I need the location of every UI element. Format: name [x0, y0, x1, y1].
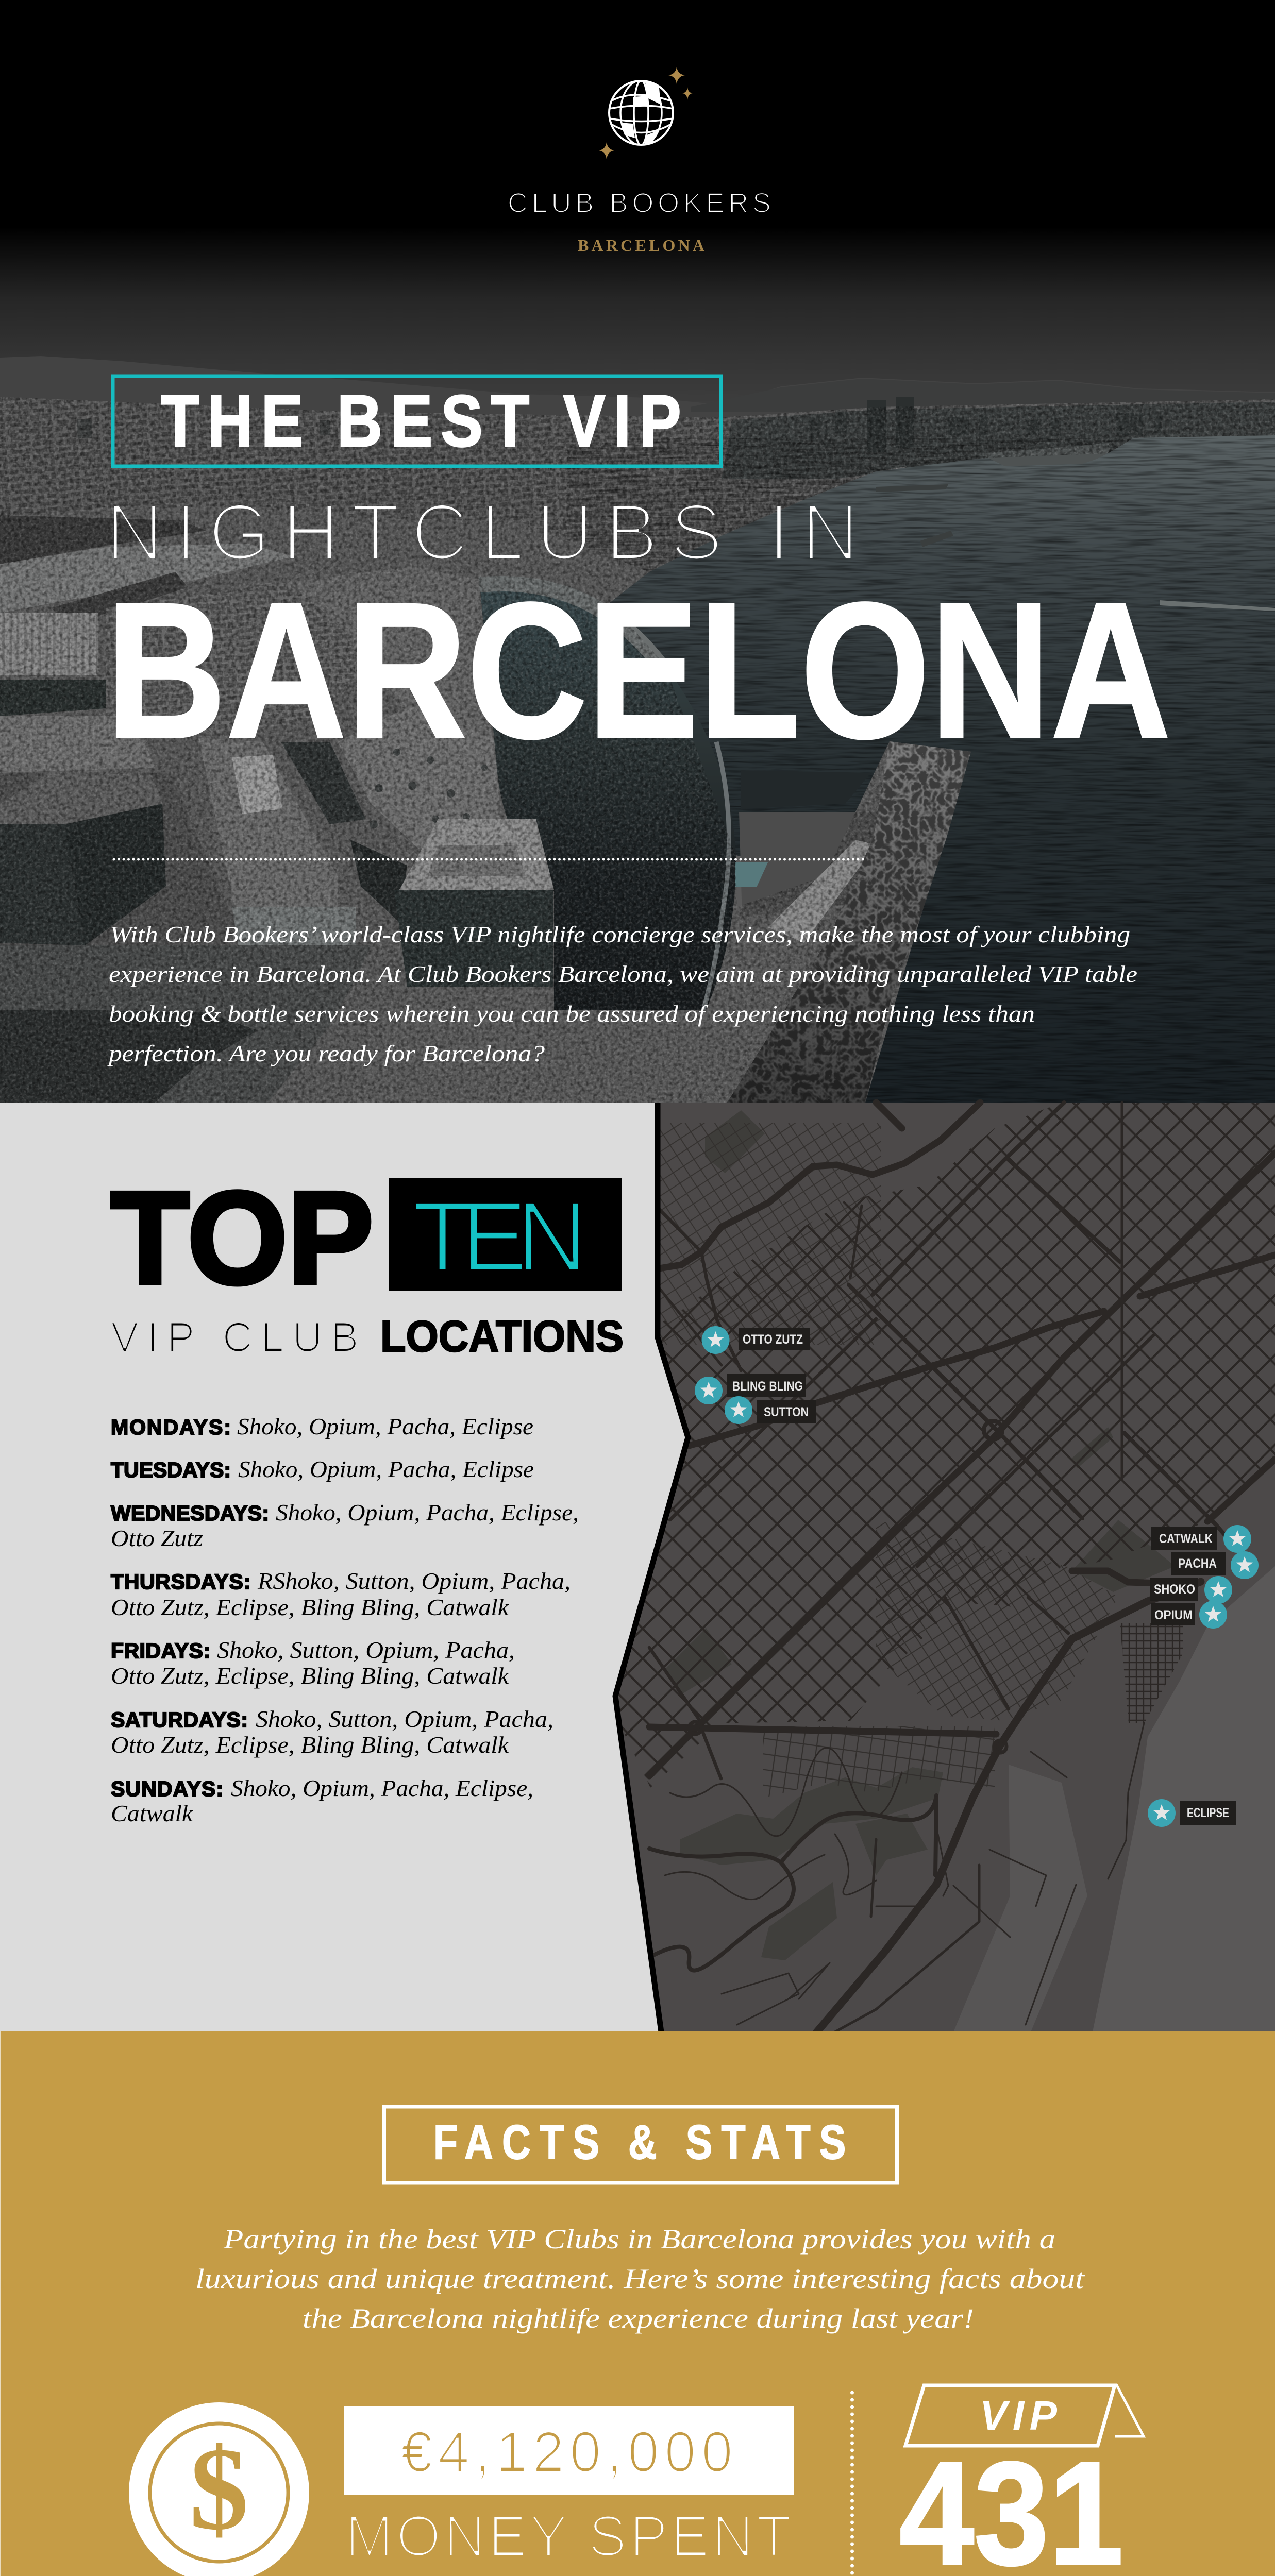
map pin: OTTO ZUTZ: [702, 1326, 810, 1354]
heading: TEN badge: TEN: [412, 1181, 588, 1292]
row: Tuesdays: Shoko, Opium, Pacha, Eclipse: [238, 1456, 534, 1482]
row: Fridays: Otto Zutz, Eclipse, Bling Bling, Catwalk: [111, 1663, 510, 1689]
map pin: OPIUM: OPIUM: [1154, 1608, 1193, 1622]
map pin: SHOKO: SHOKO: [1154, 1582, 1195, 1597]
row: Saturdays: Otto Zutz, Eclipse, Bling Bling, Catwalk: [111, 1732, 510, 1758]
map pin: OTTO ZUTZ: OTTO ZUTZ: [743, 1332, 803, 1347]
map pin: ECLIPSE: ECLIPSE: [1187, 1806, 1229, 1820]
icon: dollar coin: $: [190, 2423, 248, 2554]
logo subtitle: BARCELONA: BARCELONA: [578, 236, 704, 255]
logo: disco ball with stars: [599, 67, 693, 159]
row: Thursdays: THURSDAYS:: [111, 1570, 250, 1594]
VIP ribbon: [905, 2384, 1144, 2446]
row: Wednesdays: Otto Zutz: [111, 1525, 203, 1551]
map pin: OPIUM: [1151, 1601, 1227, 1629]
map pin: PACHA: [1171, 1551, 1259, 1579]
schedule list: [111, 1413, 579, 1826]
row: Mondays: [111, 1413, 533, 1439]
panel: facts and stats: [0, 2031, 1275, 2576]
row: Wednesdays: WEDNESDAYS:: [111, 1501, 269, 1525]
map pin: BLING BLING: BLING BLING: [732, 1379, 803, 1394]
subheading: LOCATIONS: LOCATIONS: [380, 1312, 624, 1361]
vertical dotted divider: [850, 2393, 854, 2576]
row: Thursdays: RShoko, Sutton, Opium, Pacha,: [257, 1568, 571, 1594]
logo wordmark: CLUB BOOKERS: CLUB BOOKERS: [508, 188, 771, 218]
row: Saturdays: Shoko, Sutton, Opium, Pacha,: [256, 1706, 553, 1732]
row: Sundays: SUNDAYS:: [111, 1777, 223, 1801]
grey panel with angled edge: [0, 1103, 688, 2032]
row: Sundays: Catwalk: [111, 1800, 194, 1826]
row: Tuesdays: [111, 1456, 534, 1482]
map pin: SHOKO: [1150, 1576, 1232, 1604]
row: Mondays: Shoko, Opium, Pacha, Eclipse: [237, 1413, 533, 1439]
row: Thursdays: [111, 1568, 571, 1620]
intro paragraph: experience in Barcelona. At Club Bookers Barcelona, we aim at providing unparalleled VIP table: [109, 961, 1137, 987]
intro text: Partying in the best VIP Clubs in Barcelona provides you with a: [223, 2224, 1055, 2255]
stat: money spent value: [344, 2406, 794, 2495]
breakwaters and marina: [876, 443, 1275, 611]
VIP ribbon: VIP: [980, 2393, 1058, 2438]
map pin: PACHA: PACHA: [1178, 1556, 1217, 1571]
row: Saturdays: [111, 1706, 553, 1758]
row: Wednesdays: Shoko, Opium, Pacha, Eclipse,: [276, 1499, 579, 1526]
row: Fridays: FRIDAYS:: [111, 1639, 210, 1663]
intro paragraph: booking & bottle services wherein you can be assured of experiencing nothing less than: [109, 1001, 1035, 1027]
map pin: SUTTON: SUTTON: [764, 1405, 809, 1419]
title: NIGHTCLUBS IN: NIGHTCLUBS IN: [106, 487, 859, 577]
panel: hero: [0, 0, 1275, 1103]
panel: top ten schedule: [0, 1103, 688, 2032]
map pin: SUTTON: [725, 1396, 816, 1424]
panel: map of club locations: [608, 1103, 1275, 2032]
map pin: CATWALK: [1151, 1525, 1251, 1553]
intro paragraph: [107, 921, 1137, 1066]
dotted divider: [114, 858, 864, 860]
street map: [608, 1103, 1275, 2032]
map pin: ECLIPSE: [1148, 1799, 1236, 1827]
title: THE BEST VIP: THE BEST VIP: [161, 380, 681, 462]
row: Fridays: [111, 1637, 515, 1689]
row: Sundays: [111, 1775, 533, 1826]
map pin: BLING BLING: [695, 1374, 806, 1404]
intro paragraph: With Club Bookers’ world-class VIP nightlife concierge services, make the most of your clubbing: [110, 921, 1130, 947]
row: Sundays: Shoko, Opium, Pacha, Eclipse,: [231, 1775, 533, 1801]
panel edge stroke: [615, 1103, 688, 2032]
row: Saturdays: SATURDAYS:: [111, 1708, 248, 1732]
intro paragraph: perfection. Are you ready for Barcelona?: [107, 1040, 545, 1066]
teal title frame: [113, 376, 721, 466]
intro text: the Barcelona nightlife experience during last year!: [303, 2303, 974, 2334]
icon: dollar coin: [129, 2402, 309, 2576]
stat: money spent value: €4,120,000: [401, 2420, 733, 2484]
row: Fridays: Shoko, Sutton, Opium, Pacha,: [217, 1637, 515, 1663]
left edge highlight: [0, 2031, 1, 2576]
heading: FACTS & STATS: [384, 2107, 897, 2183]
map pin: CATWALK: CATWALK: [1159, 1532, 1213, 1546]
hero photo: aerial view of Barcelona coast: [0, 242, 1275, 1103]
intro text: luxurious and unique treatment. Here’s some interesting facts about: [195, 2263, 1085, 2294]
gold background: [0, 2031, 1275, 2576]
subheading: VIP CLUB: VIP CLUB: [111, 1314, 359, 1361]
stat label: MONEY SPENT: MONEY SPENT: [345, 2504, 792, 2568]
row: Wednesdays: [111, 1499, 579, 1551]
heading: FACTS & STATS: FACTS & STATS: [433, 2115, 846, 2170]
row: Tuesdays: TUESDAYS:: [111, 1458, 231, 1482]
row: Thursdays: Otto Zutz, Eclipse, Bling Bling, Catwalk: [111, 1594, 510, 1620]
intro text: [195, 2224, 1085, 2334]
row: Mondays: MONDAYS:: [111, 1415, 231, 1439]
heading: TOP: TOP: [111, 1164, 374, 1312]
